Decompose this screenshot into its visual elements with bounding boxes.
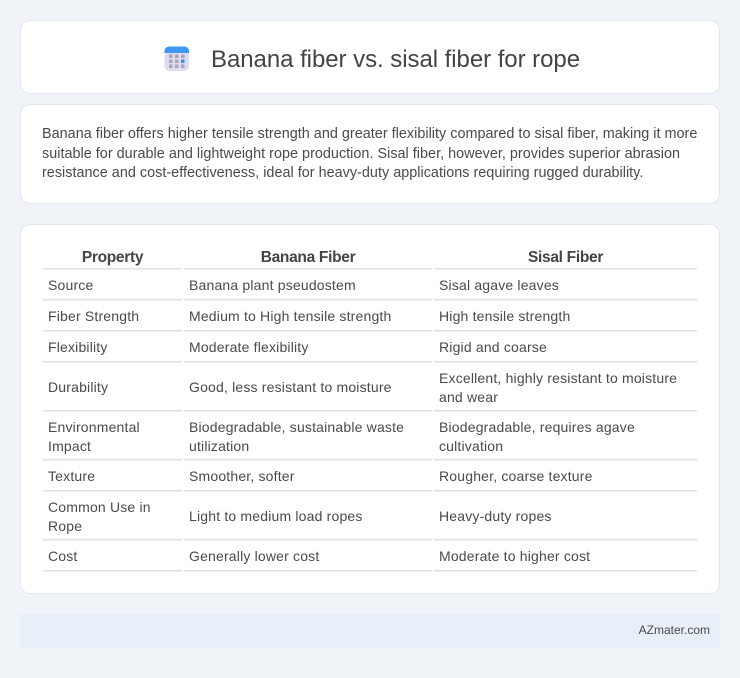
comparison table: Cost (48, 548, 78, 564)
comparison table: High tensile strength (439, 308, 570, 324)
header: property: Property (82, 249, 143, 266)
comparison table: Medium to High tensile strength (189, 308, 391, 324)
comparison table: Good, less resistant to moisture (189, 379, 392, 395)
comparison table: Smoother, softer (189, 468, 295, 484)
comparison table: Impact (48, 438, 91, 454)
comparison table: Biodegradable, requires agave (439, 419, 635, 435)
comparison table: Rope (48, 518, 82, 534)
summary text: Banana fiber offers higher tensile strength and greater flexibility compared to sisal fiber, making it more (42, 126, 697, 142)
comparison table: Source (48, 277, 93, 293)
title card (20, 20, 720, 94)
footer bar (20, 614, 720, 648)
comparison table: Excellent, highly resistant to moisture (439, 370, 677, 386)
title: Banana fiber vs. sisal fiber for rope (211, 46, 580, 73)
comparison table: Texture (48, 468, 95, 484)
comparison table: Durability (48, 379, 108, 395)
comparison table: Fiber Strength (48, 308, 139, 324)
comparison table: Rigid and coarse (439, 339, 547, 355)
comparison table: cultivation (439, 438, 503, 454)
footer credit: AZmater.com (639, 623, 710, 637)
summary text (42, 126, 697, 181)
comparison table: Moderate flexibility (189, 339, 309, 355)
comparison table: Heavy-duty ropes (439, 508, 552, 524)
comparison table: Biodegradable, sustainable waste (189, 419, 404, 435)
header: sisal fiber: Sisal Fiber (528, 249, 603, 266)
comparison table: Banana plant pseudostem (189, 277, 356, 293)
comparison table: and wear (439, 389, 498, 405)
comparison table: Rougher, coarse texture (439, 468, 593, 484)
summary card (20, 104, 720, 204)
comparison table: Flexibility (48, 339, 108, 355)
comparison table: Light to medium load ropes (189, 508, 363, 524)
summary text: resistance and cost-effectiveness, ideal for heavy-duty applications requiring rugged durability. (42, 165, 643, 181)
comparison table: Environmental (48, 419, 140, 435)
table card (20, 224, 720, 594)
comparison table: Generally lower cost (189, 548, 319, 564)
comparison table: Common Use in (48, 499, 151, 515)
icon: calendar (164, 46, 189, 71)
comparison table: utilization (189, 438, 249, 454)
comparison table: Sisal agave leaves (439, 277, 559, 293)
header: banana fiber: Banana Fiber (261, 249, 355, 266)
summary text: suitable for durable and lightweight rope production. Sisal fiber, however, provides superior abrasion (42, 146, 680, 162)
comparison table: Moderate to higher cost (439, 548, 590, 564)
